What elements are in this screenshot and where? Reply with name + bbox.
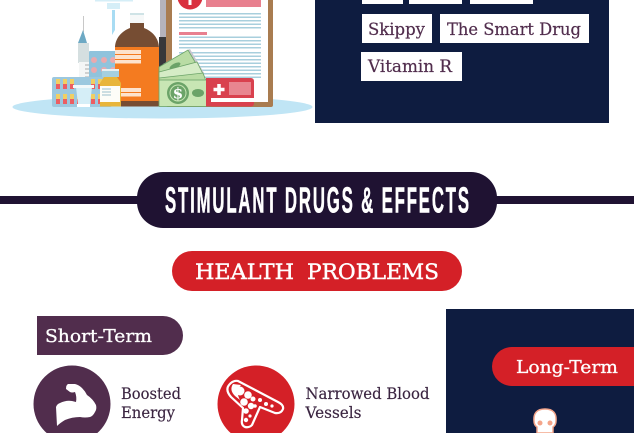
heading: health problems: PROBLEMS: [307, 260, 439, 284]
text: boosted energy: Energy: [121, 403, 175, 422]
heading: health problems: [172, 251, 462, 291]
illustration: medicine and medical bills: [12, 0, 312, 118]
icon: syringe: [78, 16, 89, 84]
icon: medicine cup: [73, 85, 94, 107]
tag: Vitamin R: [361, 52, 462, 81]
icon: blister pack front: [52, 77, 112, 107]
panel: street names: [315, 0, 609, 123]
icon: small pill jar: [100, 69, 121, 106]
tag: The Smart Drug: [440, 14, 589, 43]
heading: long-term: [492, 347, 634, 386]
text: narrowed blood vessels: Vessels: [305, 403, 362, 422]
title: [137, 172, 497, 228]
heading: health problems: HEALTH: [195, 260, 294, 284]
text: narrowed blood vessels: Narrowed Blood: [306, 384, 430, 403]
icon: flexed muscle: [34, 366, 110, 433]
icon: IV stand and drip: [95, 0, 166, 67]
icon: banknotes: $: [173, 84, 183, 102]
heading: long-term: Long-Term: [516, 357, 618, 378]
text: narrowed blood vessels: [305, 384, 430, 422]
icon: narrowed blood vessel: [218, 366, 294, 433]
icon: clipboard with report: [166, 0, 273, 107]
text: boosted energy: Boosted: [121, 384, 181, 403]
icon: skull: [534, 409, 556, 433]
icon: red medical card: [206, 78, 254, 106]
tag: Skippy: Skippy: [368, 20, 425, 40]
text: boosted energy: [121, 384, 181, 422]
icon: large brown bottle: [115, 13, 159, 106]
panel: long-term: [446, 309, 634, 433]
heading: short-term: Short-Term: [45, 326, 152, 347]
icon: blister pack back: [89, 51, 117, 81]
ground ellipse: [12, 96, 312, 118]
heading: short-term: [37, 316, 183, 355]
tag: The Smart Drug: The Smart Drug: [447, 20, 581, 40]
title: STIMULANT DRUGS & EFFECTS: [165, 180, 469, 221]
tag: Skippy: [362, 14, 432, 43]
icon: banknotes: [159, 49, 211, 106]
tag row: cropped tags: [362, 0, 533, 4]
tag: Vitamin R: Vitamin R: [367, 57, 453, 77]
section divider line: [0, 196, 634, 204]
